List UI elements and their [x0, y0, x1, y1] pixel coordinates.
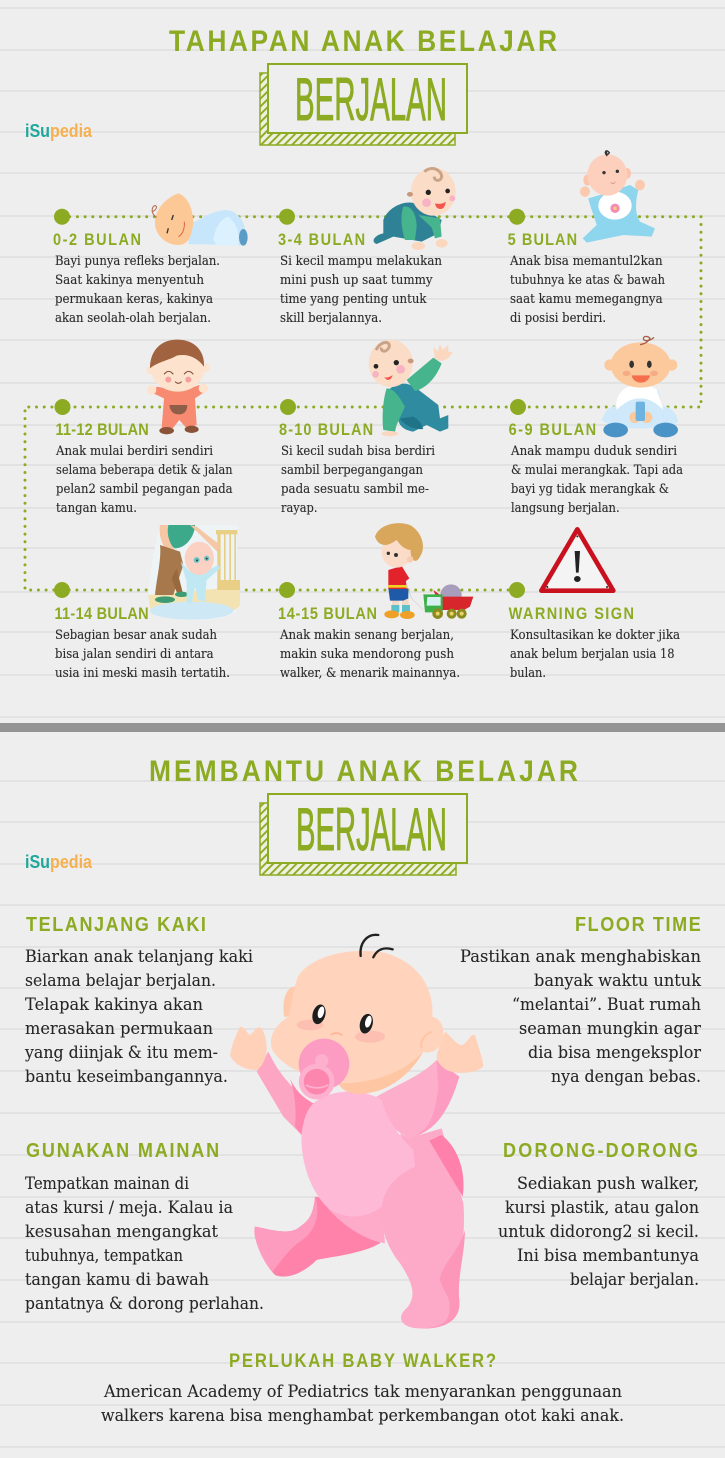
tip: floor time: [460, 914, 702, 1087]
milestone: 6-9 bulan: langsung berjalan.: [511, 501, 620, 516]
tip: telanjang kaki: [24, 914, 254, 1087]
section: perlukah baby walker: American Academy of Pediatrics tak menyarankan penggunaan: [103, 1382, 622, 1402]
tip: telanjang kaki: selama belajar berjalan.: [25, 971, 216, 991]
milestone: 8-10 bulan: 8-10 BULAN: [279, 421, 373, 439]
tip: floor time: “melantai”. Buat rumah: [512, 995, 701, 1015]
tip: dorong-dorong: belajar berjalan.: [570, 1270, 699, 1290]
title box: berjalan: [260, 64, 467, 145]
tip: dorong-dorong: Sediakan push walker,: [517, 1174, 699, 1194]
milestone: 0-2 bulan: Bayi punya refleks berjalan.: [55, 254, 220, 269]
icon: boy pulling toy truck: [375, 523, 473, 619]
milestone: 11-12 bulan: tangan kamu.: [56, 501, 137, 516]
milestone: 8-10 bulan: sambil berpegangangan: [281, 463, 424, 478]
tip: telanjang kaki: Telapak kakinya akan: [25, 995, 203, 1015]
timeline path: [25, 209, 701, 598]
milestone: 3-4 bulan: 3-4 BULAN: [278, 231, 365, 249]
tip: floor time: banyak waktu untuk: [534, 971, 702, 991]
milestone: 11-12 bulan: selama beberapa detik & jalan: [56, 463, 233, 478]
milestone: 0-2 bulan: akan seolah-olah berjalan.: [55, 311, 211, 326]
milestone: 3-4 bulan: [278, 231, 443, 326]
illustration: pink baby with pacifier: [230, 935, 483, 1329]
milestone: 0-2 bulan: Saat kakinya menyentuh: [55, 273, 205, 288]
milestone: 6-9 bulan: [509, 421, 683, 516]
milestone: 11-14 bulan: usia ini meski masih tertatih.: [55, 666, 230, 681]
tip: floor time: seaman mungkin agar: [519, 1019, 702, 1039]
milestone: 11-12 bulan: [55, 421, 233, 516]
section: perlukah baby walker: walkers karena bisa menghambat perkembangan otot kaki anak.: [101, 1406, 624, 1426]
milestone: 11-14 bulan: 11-14 BULAN: [54, 605, 149, 623]
tip: gunakan mainan: Tempatkan mainan di: [25, 1174, 189, 1194]
milestone: warning sign: anak belum berjalan usia 18: [510, 647, 675, 662]
icon: parent helping baby walk: [148, 525, 240, 620]
icon: standing toddler in salmon: [146, 340, 210, 434]
milestone: 11-12 bulan: 11-12 BULAN: [56, 421, 149, 439]
milestone: 5 bulan: [508, 231, 666, 326]
tip: telanjang kaki: merasakan permukaan: [25, 1019, 213, 1039]
milestone: 14-15 bulan: walker, & menarik mainannya.: [280, 666, 460, 681]
milestone: 6-9 bulan: & mulai merangkak. Tapi ada: [511, 463, 683, 478]
title box: berjalan: BERJALAN: [295, 66, 447, 133]
milestone: warning sign: [509, 605, 680, 681]
tip: telanjang kaki: Biarkan anak telanjang kaki: [25, 947, 254, 967]
tip: floor time: FLOOR TIME: [575, 914, 701, 936]
title box: berjalan second: [260, 794, 467, 875]
tip: gunakan mainan: atas kursi / meja. Kalau ia: [25, 1198, 233, 1218]
milestone: 5 bulan: 5 BULAN: [508, 231, 577, 249]
milestone: 0-2 bulan: [53, 231, 220, 326]
tip: dorong-dorong: kursi plastik, atau galon: [505, 1198, 699, 1218]
tip: dorong-dorong: Ini bisa membantunya: [517, 1246, 699, 1266]
milestone: 14-15 bulan: 14-15 BULAN: [278, 605, 377, 623]
milestone: 11-12 bulan: Anak mulai berdiri sendiri: [55, 444, 213, 459]
milestone: 5 bulan: di posisi berdiri.: [510, 311, 606, 326]
logo: isupedia second: iSupedia: [25, 852, 93, 872]
milestone: 6-9 bulan: Anak mampu duduk sendiri: [510, 444, 677, 459]
tip: floor time: dia bisa mengeksplor: [528, 1043, 702, 1063]
logo: isupedia: iSupedia: [25, 121, 93, 141]
icon: sitting baby with bottle: [602, 337, 678, 437]
title box: berjalan second: BERJALAN: [296, 796, 447, 863]
tip: dorong-dorong: [498, 1140, 699, 1290]
milestone: 3-4 bulan: mini push up saat tummy: [280, 273, 433, 288]
tip: gunakan mainan: pantatnya & dorong perlahan.: [25, 1294, 264, 1314]
milestone: 8-10 bulan: pada sesuatu sambil me-: [281, 482, 429, 497]
tip: telanjang kaki: yang diinjak & itu mem-: [24, 1043, 218, 1063]
milestone: 6-9 bulan: 6-9 BULAN: [509, 421, 596, 439]
milestone: 14-15 bulan: [278, 605, 460, 681]
milestone: 6-9 bulan: bayi yg tidak merangkak &: [511, 482, 669, 497]
icon: sleeping baby: [152, 193, 248, 246]
icon: warning triangle: [541, 529, 613, 591]
milestone: 8-10 bulan: rayap.: [281, 501, 318, 516]
milestone: warning sign: WARNING SIGN: [509, 605, 634, 623]
section separator band: [0, 723, 725, 732]
milestone: 8-10 bulan: [279, 421, 435, 516]
milestone: 11-12 bulan: pelan2 sambil pegangan pada: [56, 482, 233, 497]
milestone: 0-2 bulan: 0-2 BULAN: [53, 231, 141, 249]
milestone: 14-15 bulan: makin suka mendorong push: [280, 647, 455, 662]
tip: gunakan mainan: tubuhnya, tempatkan: [25, 1246, 183, 1266]
milestone: 5 bulan: saat kamu memegangnya: [510, 292, 663, 307]
milestone: 0-2 bulan: permukaan keras, kakinya: [55, 292, 213, 307]
milestone: 11-14 bulan: Sebagian besar anak sudah: [55, 628, 218, 643]
tip: gunakan mainan: GUNAKAN MAINAN: [26, 1140, 219, 1162]
milestone: 8-10 bulan: Si kecil sudah bisa berdiri: [281, 444, 435, 459]
tip: floor time: Pastikan anak menghabiskan: [460, 947, 701, 967]
title: membantu anak belajar: MEMBANTU ANAK BELAJAR: [149, 753, 578, 787]
tip: gunakan mainan: kesusahan mengangkat: [25, 1222, 218, 1242]
icon: baby reaching up in green: [369, 340, 453, 436]
milestone: 11-14 bulan: [54, 605, 230, 681]
milestone: 3-4 bulan: Si kecil mampu melakukan: [280, 254, 443, 269]
tip: dorong-dorong: untuk didorong2 si kecil.: [498, 1222, 699, 1242]
milestone: 14-15 bulan: Anak makin senang berjalan,: [279, 628, 454, 643]
icon: crawling baby: [374, 168, 456, 250]
tip: floor time: nya dengan bebas.: [551, 1067, 701, 1087]
milestone: 3-4 bulan: time yang penting untuk: [280, 292, 427, 307]
milestone: warning sign: Konsultasikan ke dokter jika: [510, 628, 680, 643]
title: tahapan anak belajar: TAHAPAN ANAK BELAJAR: [169, 23, 557, 57]
milestone: 11-14 bulan: bisa jalan sendiri di antara: [55, 647, 214, 662]
tip: telanjang kaki: TELANJANG KAKI: [26, 914, 206, 936]
tip: gunakan mainan: [25, 1140, 264, 1314]
milestone: 5 bulan: Anak bisa memantul2kan: [509, 254, 663, 269]
tip: dorong-dorong: DORONG-DORONG: [503, 1140, 698, 1162]
tip: telanjang kaki: bantu keseimbangannya.: [25, 1067, 228, 1087]
milestone: 5 bulan: tubuhnya ke atas & bawah: [510, 273, 666, 288]
milestone: 3-4 bulan: skill berjalannya.: [280, 311, 382, 326]
section: perlukah baby walker: [101, 1350, 624, 1426]
icon: baby in blue with bib: [580, 151, 655, 243]
section: perlukah baby walker: PERLUKAH BABY WALKER?: [229, 1350, 496, 1371]
tip: gunakan mainan: tangan kamu di bawah: [25, 1270, 209, 1290]
milestone: warning sign: bulan.: [510, 666, 546, 681]
